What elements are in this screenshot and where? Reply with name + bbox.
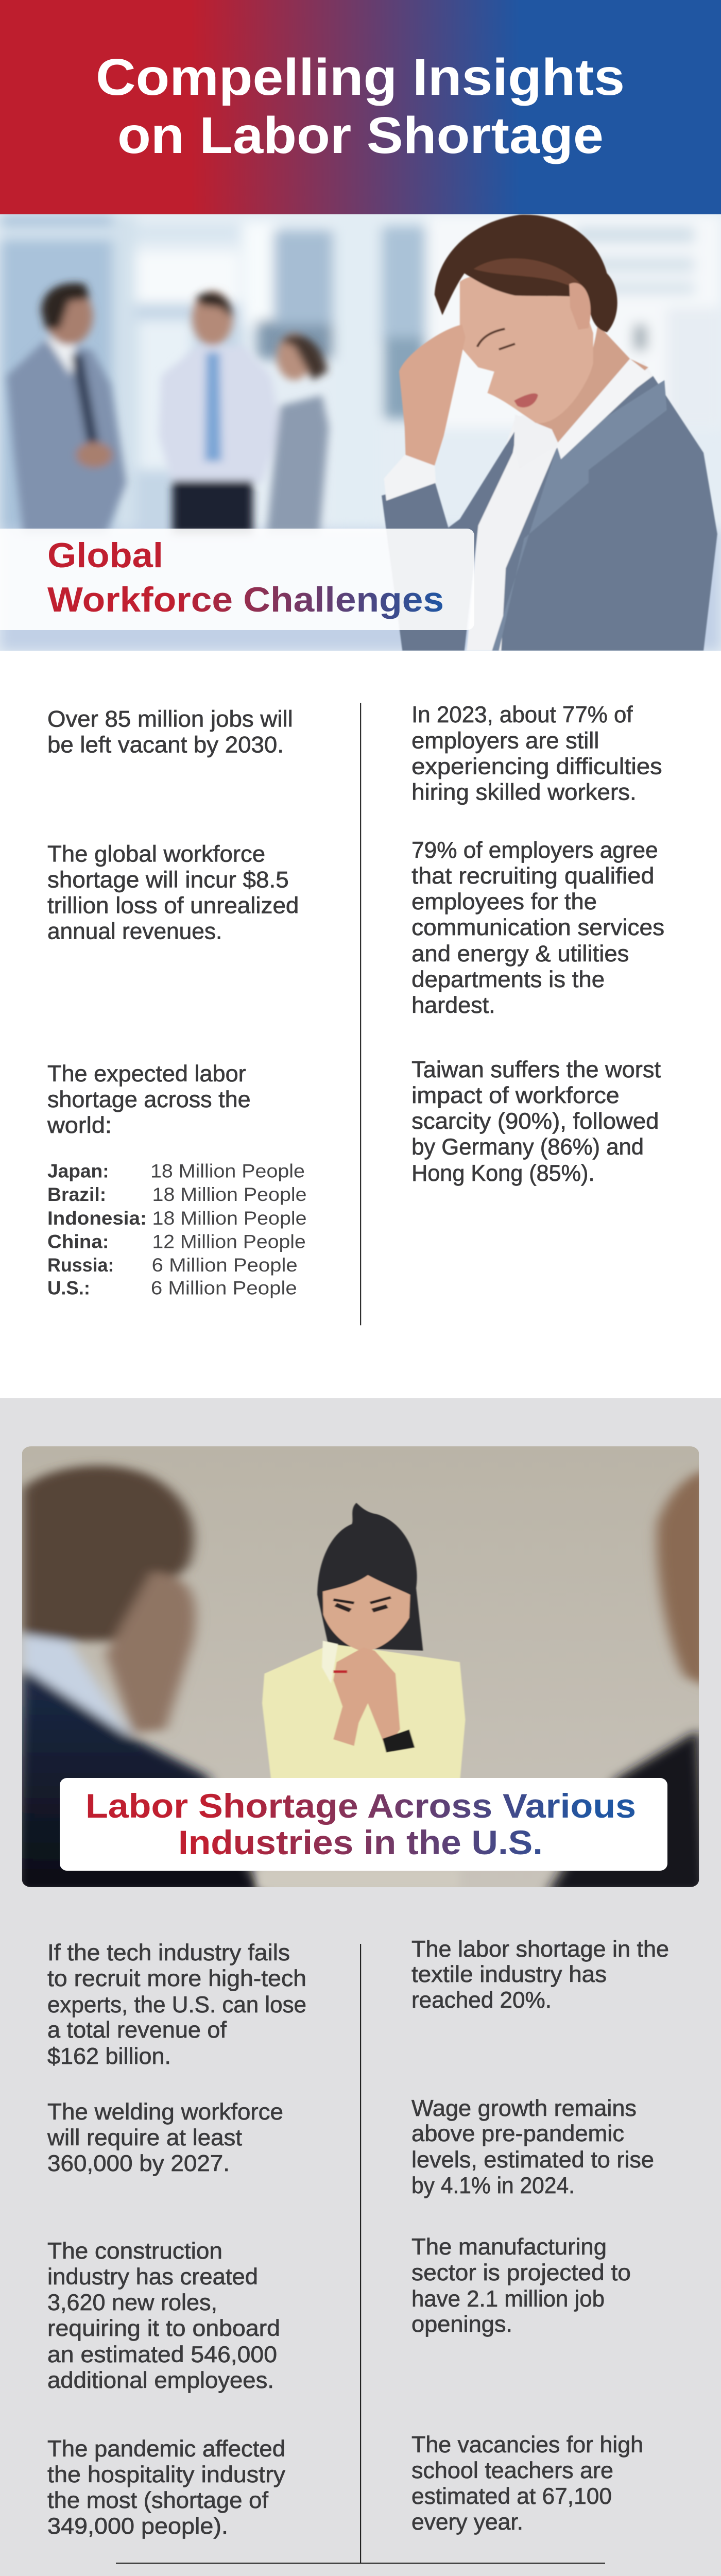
stat: workforce scarcity by place: impact of workforce bbox=[411, 1083, 620, 1108]
stat: hospitality: The pandemic affected bbox=[47, 2436, 285, 2462]
left blurred person bbox=[14, 1466, 262, 1894]
stat: welding: The welding workforce bbox=[47, 2099, 283, 2125]
stat: textile: textile industry has bbox=[411, 1962, 607, 1987]
stat: textile bbox=[411, 1937, 669, 2013]
stat: welding bbox=[47, 2099, 283, 2176]
stat: expected labor shortage: The expected labor bbox=[47, 1061, 246, 1087]
country shortage table: Japan: bbox=[47, 1160, 109, 1182]
country shortage table: Russia: bbox=[47, 1254, 114, 1276]
country shortage table: Indonesia: bbox=[47, 1207, 147, 1229]
section heading: Labor Shortage Across Various Industries: Labor Shortage Across Various bbox=[85, 1787, 636, 1825]
stat: tech industry: $162 billion. bbox=[47, 2044, 171, 2069]
stat: hiring difficulties: In 2023, about 77% of bbox=[411, 702, 633, 727]
stat: teachers: school teachers are bbox=[411, 2458, 613, 2483]
stat: recruiting qualified employees: hardest. bbox=[411, 993, 495, 1018]
stat: hiring difficulties bbox=[411, 702, 662, 805]
section heading: Labor Shortage Across Various Industries: Industries in the U.S. bbox=[178, 1823, 543, 1861]
stat: manufacturing: openings. bbox=[411, 2312, 512, 2337]
stat: construction bbox=[47, 2239, 280, 2393]
panel: industry statistics bbox=[47, 1937, 672, 2576]
stat: hiring difficulties: experiencing difficulties bbox=[411, 754, 662, 779]
stat: revenue loss: annual revenues. bbox=[47, 919, 222, 944]
stat: textile: reached 20%. bbox=[411, 1988, 552, 2013]
stat: tech industry: a total revenue of bbox=[47, 2018, 227, 2043]
stat: jobs vacant: be left vacant by 2030. bbox=[47, 733, 284, 758]
stat: welding: will require at least bbox=[47, 2125, 243, 2150]
stat: construction: 3,620 new roles, bbox=[47, 2290, 217, 2315]
stat: recruiting qualified employees: 79% of employers agree bbox=[411, 838, 658, 863]
country shortage table: 6 Million People bbox=[152, 1254, 298, 1276]
stat: tech industry: If the tech industry fails bbox=[47, 1940, 290, 1965]
stat: tech industry bbox=[47, 1940, 306, 2069]
stat: hospitality: 349,000 people). bbox=[47, 2514, 228, 2539]
stat: wage growth: above pre-pandemic bbox=[411, 2121, 624, 2146]
stat: revenue loss bbox=[47, 841, 299, 944]
panel: interview candidate photo bbox=[14, 1446, 708, 1894]
country shortage table: U.S.: bbox=[47, 1277, 90, 1298]
section heading: Labor Shortage Across Various Industries bbox=[60, 1778, 667, 1871]
country shortage table: 18 Million People bbox=[150, 1160, 305, 1182]
section heading: Global Workforce Challenges: Global bbox=[47, 536, 163, 575]
section heading: Global Workforce Challenges: Workforce Challenges bbox=[47, 580, 444, 619]
stat: wage growth: Wage growth remains bbox=[411, 2096, 637, 2121]
stat: tech industry: experts, the U.S. can lose bbox=[47, 1992, 306, 2018]
stat: recruiting qualified employees: communication services bbox=[411, 915, 664, 940]
title: on Labor Shortage bbox=[117, 107, 604, 164]
stat: expected labor shortage: world: bbox=[47, 1113, 112, 1138]
panel: global statistics bbox=[47, 702, 664, 1325]
stat: hiring difficulties: employers are still bbox=[411, 728, 599, 754]
stat: revenue loss: trillion loss of unrealized bbox=[47, 893, 299, 918]
background colleagues bbox=[7, 283, 329, 534]
stat: construction: requiring it to onboard bbox=[47, 2316, 280, 2341]
stat: expected labor shortage: shortage across the bbox=[47, 1087, 251, 1112]
stat: hospitality bbox=[47, 2436, 286, 2539]
stat: manufacturing: have 2.1 million job bbox=[411, 2286, 605, 2312]
stat: recruiting qualified employees bbox=[411, 838, 664, 1018]
stat: teachers bbox=[411, 2432, 643, 2535]
stat: construction: additional employees. bbox=[47, 2368, 274, 2393]
title: Compelling Insights bbox=[96, 48, 625, 106]
country shortage table: 12 Million People bbox=[152, 1230, 306, 1252]
stat: hospitality: the hospitality industry bbox=[47, 2462, 286, 2487]
stat: workforce scarcity by place: Taiwan suffers the worst bbox=[411, 1057, 661, 1082]
stat: recruiting qualified employees: and energy & utilities bbox=[411, 941, 629, 967]
country shortage table: 18 Million People bbox=[152, 1183, 307, 1205]
stat: construction: industry has created bbox=[47, 2264, 258, 2290]
stat: jobs vacant bbox=[47, 707, 293, 758]
stat: manufacturing: The manufacturing bbox=[411, 2234, 607, 2260]
stat: construction: an estimated 546,000 bbox=[47, 2342, 277, 2367]
stat: workforce scarcity by place: Hong Kong (85%). bbox=[411, 1161, 594, 1186]
foreground woman bbox=[382, 215, 717, 651]
stat: jobs vacant: Over 85 million jobs will bbox=[47, 707, 293, 732]
title bbox=[96, 48, 625, 164]
header banner bbox=[0, 0, 721, 214]
stat: teachers: estimated at 67,100 bbox=[411, 2484, 612, 2509]
stat: expected labor shortage bbox=[47, 1061, 251, 1138]
panel: grey U.S. industries section bbox=[0, 1398, 721, 2576]
stat: workforce scarcity by place: by Germany (86%) and bbox=[411, 1134, 644, 1160]
stat: revenue loss: The global workforce bbox=[47, 841, 265, 867]
stat: tech industry: to recruit more high-tech bbox=[47, 1966, 306, 1991]
stat: wage growth: by 4.1% in 2024. bbox=[411, 2173, 575, 2198]
stat: welding: 360,000 by 2027. bbox=[47, 2151, 230, 2176]
stat: teachers: every year. bbox=[411, 2510, 523, 2535]
stat: teachers: The vacancies for high bbox=[411, 2432, 643, 2458]
stat: construction: The construction bbox=[47, 2239, 222, 2264]
panel: stressed woman office photo bbox=[0, 214, 721, 651]
stat: textile: The labor shortage in the bbox=[411, 1937, 669, 1962]
country shortage table: 6 Million People bbox=[151, 1277, 297, 1298]
country shortage table: 18 Million People bbox=[152, 1207, 307, 1229]
stat: hiring difficulties: hiring skilled workers. bbox=[411, 780, 637, 805]
stat: recruiting qualified employees: employees for the bbox=[411, 889, 597, 914]
candidate bbox=[262, 1503, 466, 1782]
stat: recruiting qualified employees: that recruiting qualified bbox=[411, 863, 655, 889]
stat: wage growth bbox=[411, 2096, 654, 2198]
section heading: Global Workforce Challenges bbox=[0, 529, 474, 630]
stat: workforce scarcity by place: scarcity (90%), followed bbox=[411, 1109, 659, 1134]
right blurred person bbox=[547, 1470, 708, 1894]
country shortage table: Brazil: bbox=[47, 1183, 106, 1205]
stat: wage growth: levels, estimated to rise bbox=[411, 2147, 654, 2173]
country shortage table bbox=[47, 1160, 307, 1298]
stat: manufacturing: sector is projected to bbox=[411, 2260, 631, 2285]
stat: manufacturing bbox=[411, 2234, 631, 2337]
stat: hospitality: the most (shortage of bbox=[47, 2488, 269, 2513]
country shortage table: China: bbox=[47, 1230, 109, 1252]
stat: workforce scarcity by place bbox=[411, 1057, 661, 1186]
stat: recruiting qualified employees: departments is the bbox=[411, 967, 605, 992]
stat: revenue loss: shortage will incur $8.5 bbox=[47, 867, 289, 892]
